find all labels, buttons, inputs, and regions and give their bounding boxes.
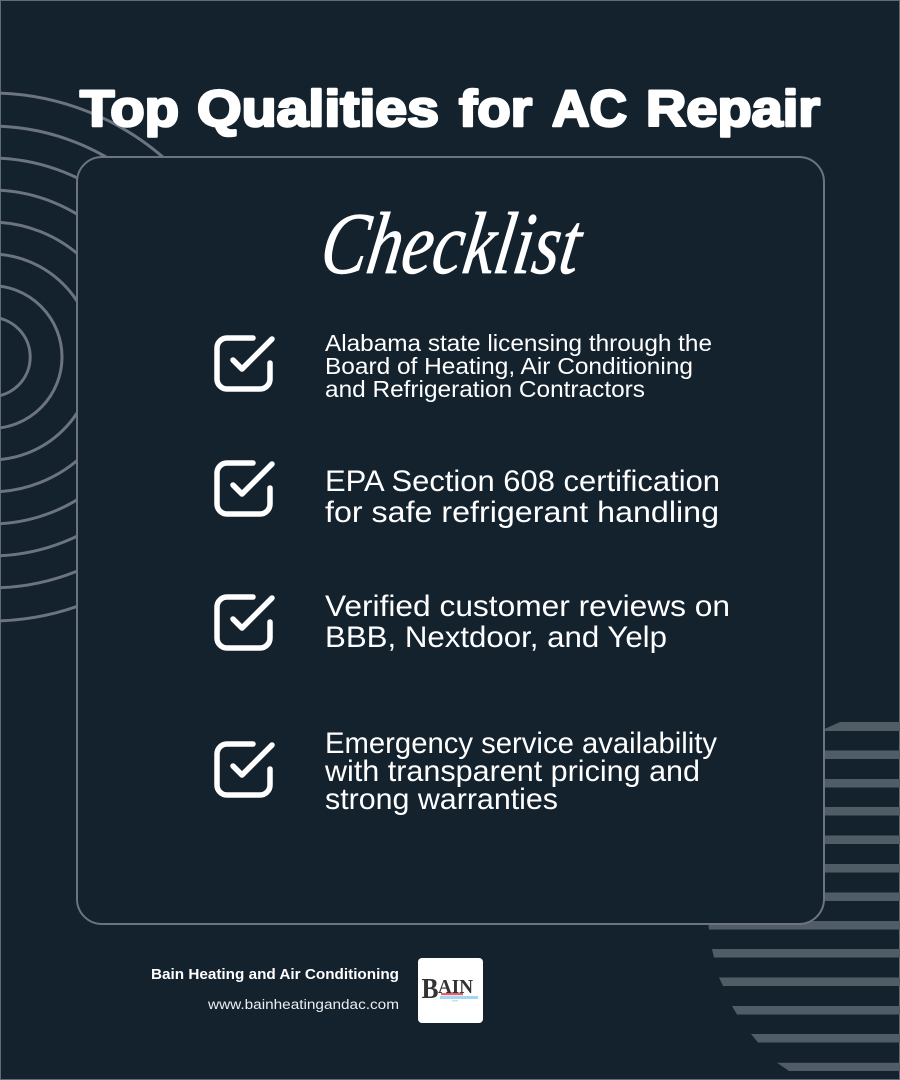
logo (418, 958, 483, 1023)
text: reviews: BBB, Nextdoor, and Yelp (325, 621, 667, 654)
title: Qualities (197, 80, 439, 137)
logo: B (422, 974, 438, 1005)
icon: checkbox (217, 338, 272, 389)
text: licensing (325, 330, 712, 402)
concentric circles decoration (0, 93, 254, 621)
text: reviews (325, 590, 730, 654)
text: licensing: Board of Heating, Air Conditioning (325, 353, 693, 379)
text: emergency service: with transparent pricing and (324, 755, 700, 788)
text: emergency service: Emergency service availability (325, 727, 717, 760)
text: reviews: Verified customer reviews on (325, 590, 730, 623)
icon: checkbox (217, 597, 272, 648)
text: licensing: and Refrigeration Contractors (325, 376, 645, 402)
logo: AIN (438, 976, 474, 998)
striped decoration (708, 722, 900, 1071)
item 3 (217, 590, 730, 654)
item 2 (217, 463, 720, 529)
title: Top (80, 80, 179, 137)
panel: checklist card (77, 157, 824, 924)
title: Repair (646, 80, 820, 137)
footer website: www.bainheatingandac.com (207, 997, 399, 1012)
text: licensing: Alabama state licensing through the (325, 330, 712, 356)
text: EPA certification (325, 465, 720, 529)
icon: checkbox (217, 463, 272, 514)
text: emergency service (324, 727, 717, 816)
item 1 (217, 330, 712, 402)
title: for (459, 80, 532, 137)
title: AC (552, 80, 627, 137)
heading: Checklist: Checklist (315, 195, 590, 293)
text: EPA certification: EPA Section 608 certification (325, 465, 720, 498)
text: emergency service: strong warranties (325, 783, 558, 816)
text: EPA certification: for safe refrigerant handling (325, 496, 719, 529)
item 4 (217, 727, 717, 816)
footer company name: Bain Heating and Air Conditioning (151, 967, 399, 983)
icon: checkbox (217, 744, 272, 795)
